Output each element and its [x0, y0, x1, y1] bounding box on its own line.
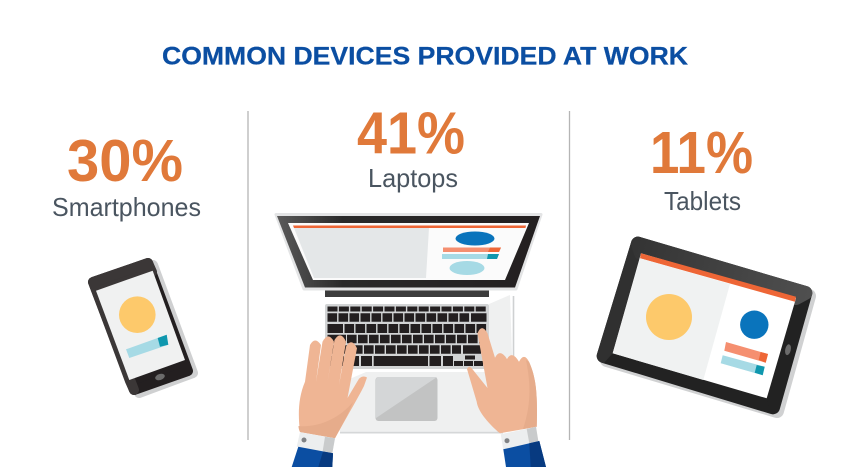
laptop base: [300, 295, 514, 433]
right shirt cuff: [501, 427, 538, 450]
left shirt cuff: [297, 432, 335, 453]
trackpad: [376, 377, 438, 421]
icon: laptop: [276, 214, 546, 467]
laptops label: Laptops: [368, 163, 458, 193]
laptop hinge: [325, 289, 489, 297]
divider left: [247, 111, 249, 440]
laptop lid: [276, 214, 541, 289]
stat: tablets: [650, 120, 753, 216]
icon: tablet: [604, 244, 809, 412]
keyboard: [325, 304, 489, 369]
tablets label: Tablets: [664, 186, 741, 216]
title: COMMON DEVICES PROVIDED AT WORK: [162, 42, 688, 70]
laptops percentage: 41%: [357, 100, 465, 166]
left hand: [298, 335, 367, 438]
smartphones percentage: 30%: [67, 128, 183, 194]
divider right: [568, 111, 570, 440]
stat: laptops: [357, 100, 465, 193]
right hand: [467, 328, 537, 433]
stat: smartphones: [52, 128, 201, 222]
right sleeve: [503, 441, 546, 467]
tablets percentage: 11%: [650, 120, 753, 186]
smartphones label: Smartphones: [52, 192, 201, 222]
icon: smartphone: [93, 263, 193, 393]
left sleeve: [292, 447, 333, 467]
